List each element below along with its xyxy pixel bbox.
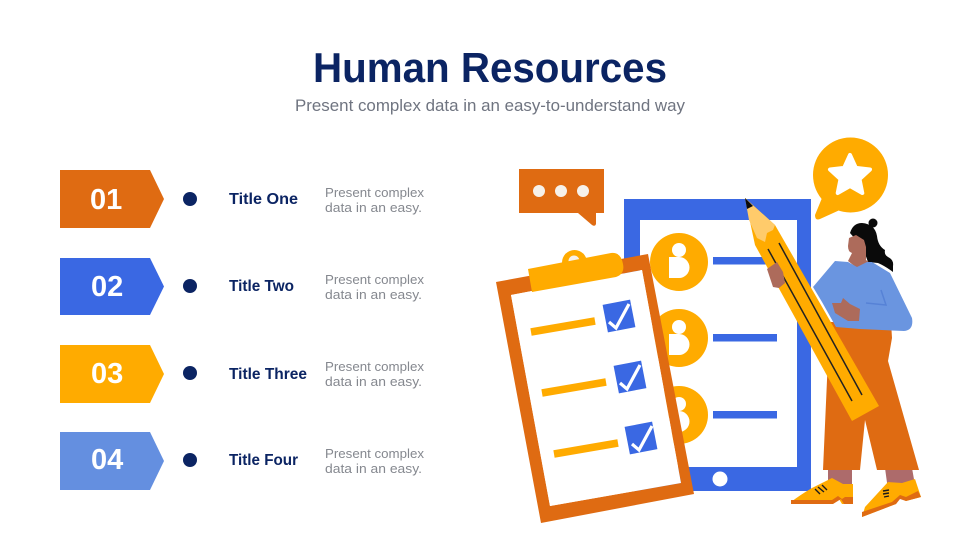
number badge 03: 03 (91, 358, 123, 390)
number badge 02: 02 (91, 271, 123, 303)
bullet dot 3 (183, 366, 197, 380)
list row 2 (60, 258, 425, 315)
checkbox 2 (614, 361, 646, 393)
bullet dot 1 (183, 192, 197, 206)
row description 3 (325, 359, 425, 389)
icon: chat bubble (519, 169, 604, 226)
row description 4: Present complex (325, 446, 425, 461)
ankles (828, 468, 915, 490)
row heading 1: Title One (229, 191, 298, 208)
title: Human Resources (313, 44, 667, 91)
illustration: human resources scene (496, 138, 921, 523)
row description 3: Present complex (325, 359, 425, 374)
row description 3: data in an easy. (325, 374, 422, 389)
left hand (832, 298, 860, 321)
checklist lines (531, 321, 618, 454)
icon: phone (624, 199, 811, 491)
number badge 01 (60, 170, 164, 228)
subtitle: Present complex data in an easy-to-understand way (295, 96, 685, 115)
row description 2: Present complex (325, 272, 425, 287)
phone profile rows (650, 233, 777, 444)
row heading 4: Title Four (229, 452, 298, 469)
list row 1 (60, 170, 425, 228)
row heading 3: Title Three (229, 366, 307, 383)
row description 4: data in an easy. (325, 461, 422, 476)
shoes (791, 478, 921, 517)
row heading 2: Title Two (229, 278, 294, 295)
head and neck (848, 235, 870, 268)
number badge 03 (60, 345, 164, 403)
number badge 01: 01 (90, 184, 122, 216)
row description 1 (325, 185, 425, 215)
hair (850, 218, 893, 272)
pencil (745, 198, 879, 421)
bullet dot 4 (183, 453, 197, 467)
list row 4 (60, 432, 425, 490)
person (745, 198, 921, 517)
icon: clipboard (496, 250, 694, 523)
right hand on pencil (767, 262, 785, 288)
row description 1: Present complex (325, 185, 425, 200)
row description 2: data in an easy. (325, 287, 422, 302)
number badge 04: 04 (91, 444, 123, 476)
number badge 02 (60, 258, 164, 315)
icon: star speech bubble (813, 138, 888, 220)
sleeve fold (866, 290, 886, 305)
checkbox 1 (603, 300, 635, 332)
jumper (813, 261, 912, 331)
number badge 04 (60, 432, 164, 490)
list row 3 (60, 345, 425, 403)
row description 2 (325, 272, 425, 302)
bullet dot 2 (183, 279, 197, 293)
row description 1: data in an easy. (325, 200, 422, 215)
trousers (823, 322, 919, 470)
row description 4 (325, 446, 425, 476)
checkbox 3 (625, 422, 657, 454)
